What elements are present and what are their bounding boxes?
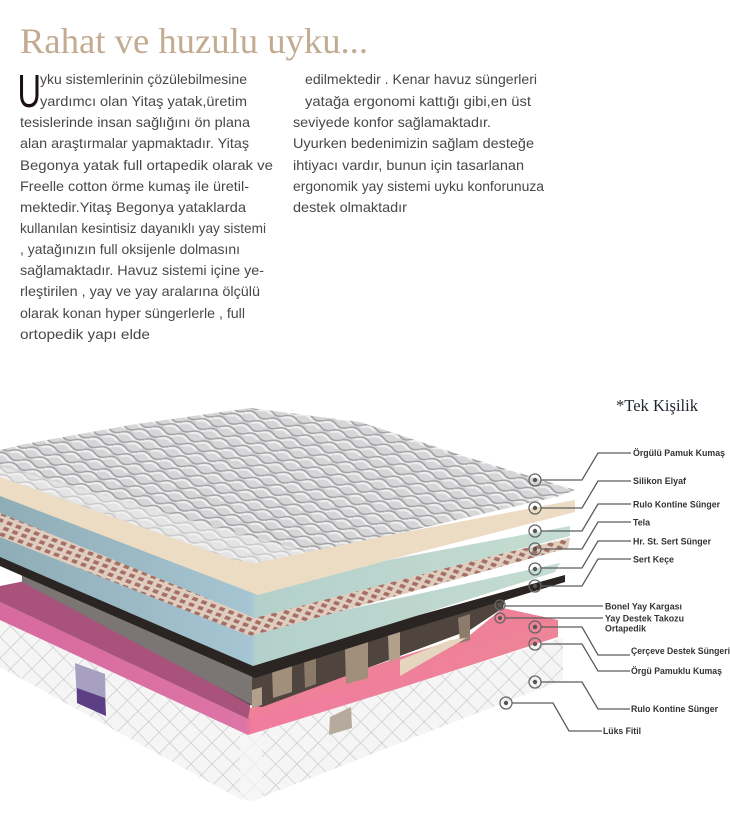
drop cap: U [18,67,41,117]
callout: Örgü Pamuklu Kumaş: Örgü Pamuklu Kumaş [631,666,722,677]
tela patterned layer [0,513,570,636]
text block: left column: alan araştırmalar yapmaktadır. Yitaş [20,135,249,151]
callout: Rulo Kontine Sünger (base) [529,676,718,715]
callout: Hr. St. Sert Sünger [529,536,711,575]
callout: Bonel Yay Kargası [495,600,682,612]
callout: Rulo Kontine Sünger (base): Rulo Kontine Sünger [631,704,718,715]
spring core [22,572,505,708]
callout: Lüks Fitil: Lüks Fitil [603,726,641,737]
text block: right column: edilmektedir . Kenar havuz süngerleri [305,71,537,87]
callout: Sert Keçe [529,554,674,592]
text block: right column [293,71,544,215]
text block: right column: Uyurken bedenimizin sağlam desteğe [293,135,534,151]
text block: left column: rleştirilen , yay ve yay aralarına ölçülü [20,283,260,299]
text block: left column: kullanılan kesintisiz dayanıklı yay sistemi [20,220,266,236]
mattress illustration [0,408,575,801]
text block: left column: Begonya yatak full ortapedik olarak ve [20,157,273,173]
beige layer [0,477,575,595]
callout: Rulo Kontine Sünger: Rulo Kontine Sünger [633,500,720,510]
black felt layer [0,555,565,678]
callout: Örgü Pamuklu Kumaş [529,638,722,677]
callout: Örgülü Pamuk Kumaş [529,448,725,486]
quilted top layer [0,408,575,563]
text block: left column: olarak konan hyper süngerlerle , full [20,305,245,321]
text block: right column: seviyede konfor sağlamaktadır. [293,114,491,130]
text block: left column: tesislerinde insan sağlığını ön plana [20,114,250,130]
upper blue foam layer [0,495,570,618]
callout: Yay Destek Takozu Ortapedik: Ortapedik [605,624,647,634]
pink frame [0,580,558,735]
text block: right column: ihtiyacı vardır, bunun için tasarlanan [293,157,524,173]
text block: left column: ortopedik yapı elde [20,326,150,342]
text block: left column: mektedir.Yitaş Begonya yataklarda [20,199,246,215]
callout: Çerçeve Destek Süngeri [529,621,730,657]
callout: Tela [529,518,651,555]
callout: Sert Keçe: Sert Keçe [633,554,674,566]
callout: Bonel Yay Kargası: Bonel Yay Kargası [605,602,682,612]
callout: Yay Destek Takozu Ortapedik: Yay Destek Takozu [605,614,684,624]
text block: left column: Freelle cotton örme kumaş ile üretil- [20,178,249,194]
callout: Rulo Kontine Sünger [529,500,720,537]
base: quilted white side panels [0,620,563,801]
text block: left column: sağlamaktadır. Havuz sistemi içine ye- [20,262,264,278]
text block: left column: yardımcı olan Yitaş yatak,üretim [40,93,247,109]
size note: *Tek Kişilik [616,396,698,415]
title: Rahat ve huzulu uyku... [20,21,368,61]
text block: left column: , yatağınızın full oksijenle dolmasını [20,241,240,257]
callout: Tela: Tela [633,518,651,528]
lower blue foam layer [0,530,560,666]
callout: Silikon Elyaf: Silikon Elyaf [633,476,687,487]
text block: right column: yatağa ergonomi kattığı gibi,en üst [305,93,531,109]
callout: Silikon Elyaf [529,476,687,514]
text block: right column: ergonomik yay sistemi uyku konforunuza [293,178,544,194]
callout: Lüks Fitil [500,697,641,737]
text block: left column: yku sistemlerinin çözülebilmesine [40,71,247,87]
text block: right column: destek olmaktadır [293,199,407,215]
text block: left column [20,71,273,342]
label tag on base [75,663,352,735]
callout: Yay Destek Takozu Ortapedik [495,613,684,634]
callout: Hr. St. Sert Sünger: Hr. St. Sert Sünger [633,536,711,548]
